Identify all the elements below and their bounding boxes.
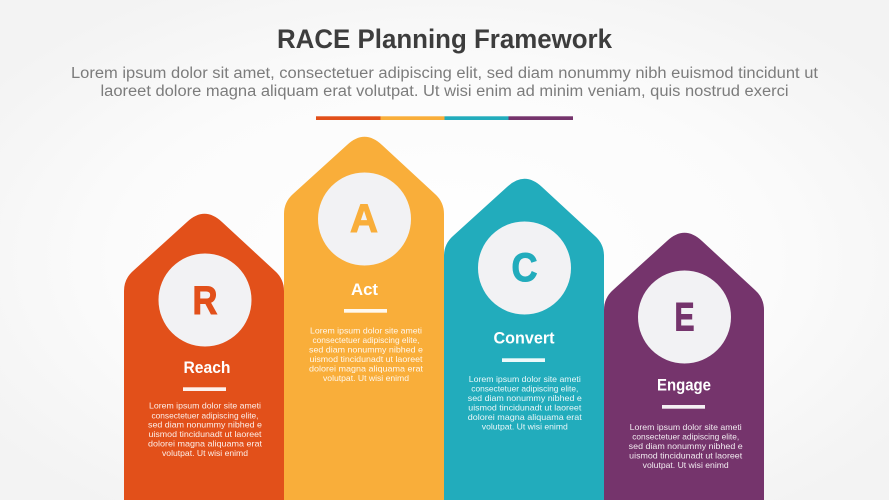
engage heading rule	[662, 405, 705, 409]
reach letter: R	[192, 279, 218, 323]
engage heading: Engage	[657, 376, 711, 395]
convert body text: consectetuer adipiscing elite,	[471, 384, 578, 394]
convert arrow shape	[444, 179, 604, 500]
engage body text: uismod tincidunadt ut laoreet	[629, 450, 743, 460]
convert heading: Convert	[494, 328, 555, 347]
engage body text: Lorem ipsum dolor site ameti	[630, 422, 742, 432]
engage letter: E	[674, 296, 694, 340]
act body text: consectetuer adipiscing elite,	[312, 335, 420, 345]
engage body text: sed diam nonummy nibhed e	[629, 441, 743, 451]
act body text: Lorem ipsum dolor site ameti	[310, 326, 422, 336]
panel: act	[284, 137, 444, 500]
reach arrow shape	[124, 214, 284, 500]
reach body text	[148, 401, 263, 458]
convert body text: Lorem ipsum dolor site ameti	[469, 374, 581, 384]
title: RACE Planning Framework	[277, 24, 612, 54]
convert heading rule	[502, 358, 545, 362]
convert letter circle	[478, 222, 571, 314]
panel: reach	[124, 214, 284, 500]
act body text: dolorei magna aliquama erat	[309, 364, 424, 374]
four-colour title rule	[316, 116, 573, 120]
act body text: uismod tincidunadt ut laoreet	[310, 354, 423, 364]
reach heading: Reach	[184, 358, 230, 377]
convert letter: C	[512, 246, 538, 290]
convert body text: volutpat. Ut wisi enimd	[482, 422, 568, 432]
panel: engage	[604, 233, 764, 500]
reach heading rule	[183, 387, 226, 391]
convert body text: dolorei magna aliquama erat	[468, 412, 583, 422]
act arrow shape	[284, 137, 444, 500]
engage arrow shape	[604, 233, 764, 500]
convert body text: uismod tincidunadt ut laoreet	[468, 403, 582, 413]
act heading rule	[344, 309, 387, 313]
convert body text	[468, 374, 583, 432]
act letter: A	[350, 197, 378, 241]
reach body text: sed diam nonummy nibhed e	[148, 420, 262, 430]
act letter circle	[318, 172, 411, 266]
engage letter circle	[638, 270, 731, 364]
reach body text: Lorem ipsum dolor site ameti	[149, 401, 261, 411]
engage body text	[629, 422, 743, 470]
reach body text: consectetuer adipiscing elite,	[152, 410, 258, 420]
subtitle text: laoreet dolore magna aliquam erat volutpat. Ut wisi enim ad minim veniam, quis nostrud exerci	[100, 83, 788, 100]
act body text: sed diam nonummy nibhed e	[309, 345, 423, 355]
act heading: Act	[351, 280, 378, 299]
subtitle text	[71, 65, 819, 100]
act body text: volutpat. Ut wisi enimd	[323, 373, 409, 383]
engage body text: consectetuer adipiscing elite,	[632, 431, 739, 441]
reach body text: volutpat. Ut wisi enimd	[162, 448, 248, 458]
convert body text: sed diam nonummy nibhed e	[468, 393, 582, 403]
reach letter circle	[158, 254, 252, 346]
act body text	[309, 326, 424, 383]
subtitle text: Lorem ipsum dolor sit amet, consectetuer adipiscing elit, sed diam nonummy nibh euismod tincidunt ut	[71, 65, 819, 82]
reach body text: uismod tincidunadt ut laoreet	[148, 429, 262, 439]
panel: convert	[444, 179, 604, 500]
reach body text: dolorei magna aliquama erat	[148, 439, 263, 449]
engage body text: volutpat. Ut wisi enimd	[643, 460, 729, 470]
